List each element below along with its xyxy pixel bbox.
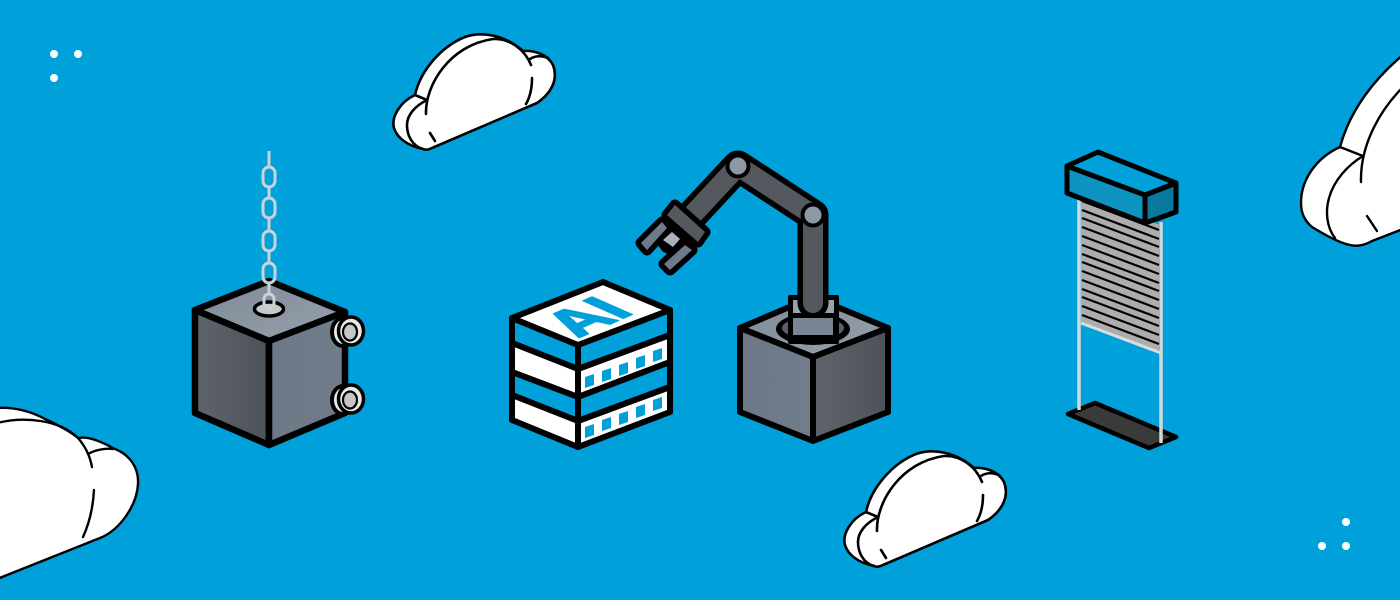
- gripper finger right: [664, 245, 692, 270]
- gripper centre block: [663, 232, 680, 247]
- AI server stack: [512, 282, 670, 447]
- server top face: [512, 282, 670, 345]
- cloud: bottom left: [0, 408, 138, 579]
- server left faces: [512, 318, 578, 447]
- arm outline: [683, 166, 813, 303]
- roller shutter: [1067, 152, 1176, 448]
- gripper finger left: [641, 222, 667, 250]
- indicator lights lower: [585, 397, 662, 438]
- bolts on right face: [332, 317, 364, 414]
- elbow joint: [728, 156, 748, 176]
- chain: [263, 151, 275, 308]
- hanging cube block: [195, 151, 364, 445]
- shutter housing: [1067, 152, 1176, 223]
- cube faces: [195, 281, 345, 445]
- gripper: [641, 205, 705, 270]
- floor plate: [1068, 403, 1176, 448]
- cloud: bottom centre: [844, 451, 1006, 567]
- shutter bottom edge: [1081, 323, 1161, 353]
- dots: top left: [50, 50, 82, 82]
- gripper backing: [655, 215, 698, 258]
- dots: bottom right: [1318, 518, 1350, 550]
- shoulder joint: [802, 204, 824, 226]
- server right faces: [578, 310, 670, 447]
- cloud: top: [393, 34, 555, 150]
- shutter slats: [1082, 201, 1159, 344]
- shutter panel: [1081, 195, 1160, 352]
- gripper head: [667, 205, 705, 242]
- cloud: right edge: [1301, 55, 1400, 246]
- indicator lights upper: [585, 348, 662, 388]
- socket: [776, 313, 850, 345]
- robot arm on base: [641, 156, 888, 441]
- mount bracket: [788, 295, 839, 344]
- mount front: [793, 318, 833, 335]
- guide rails: [1079, 198, 1161, 443]
- arm fill: [683, 166, 813, 303]
- base cube: [740, 297, 888, 441]
- eyelet: [254, 302, 284, 316]
- AI label: AI: [527, 290, 648, 344]
